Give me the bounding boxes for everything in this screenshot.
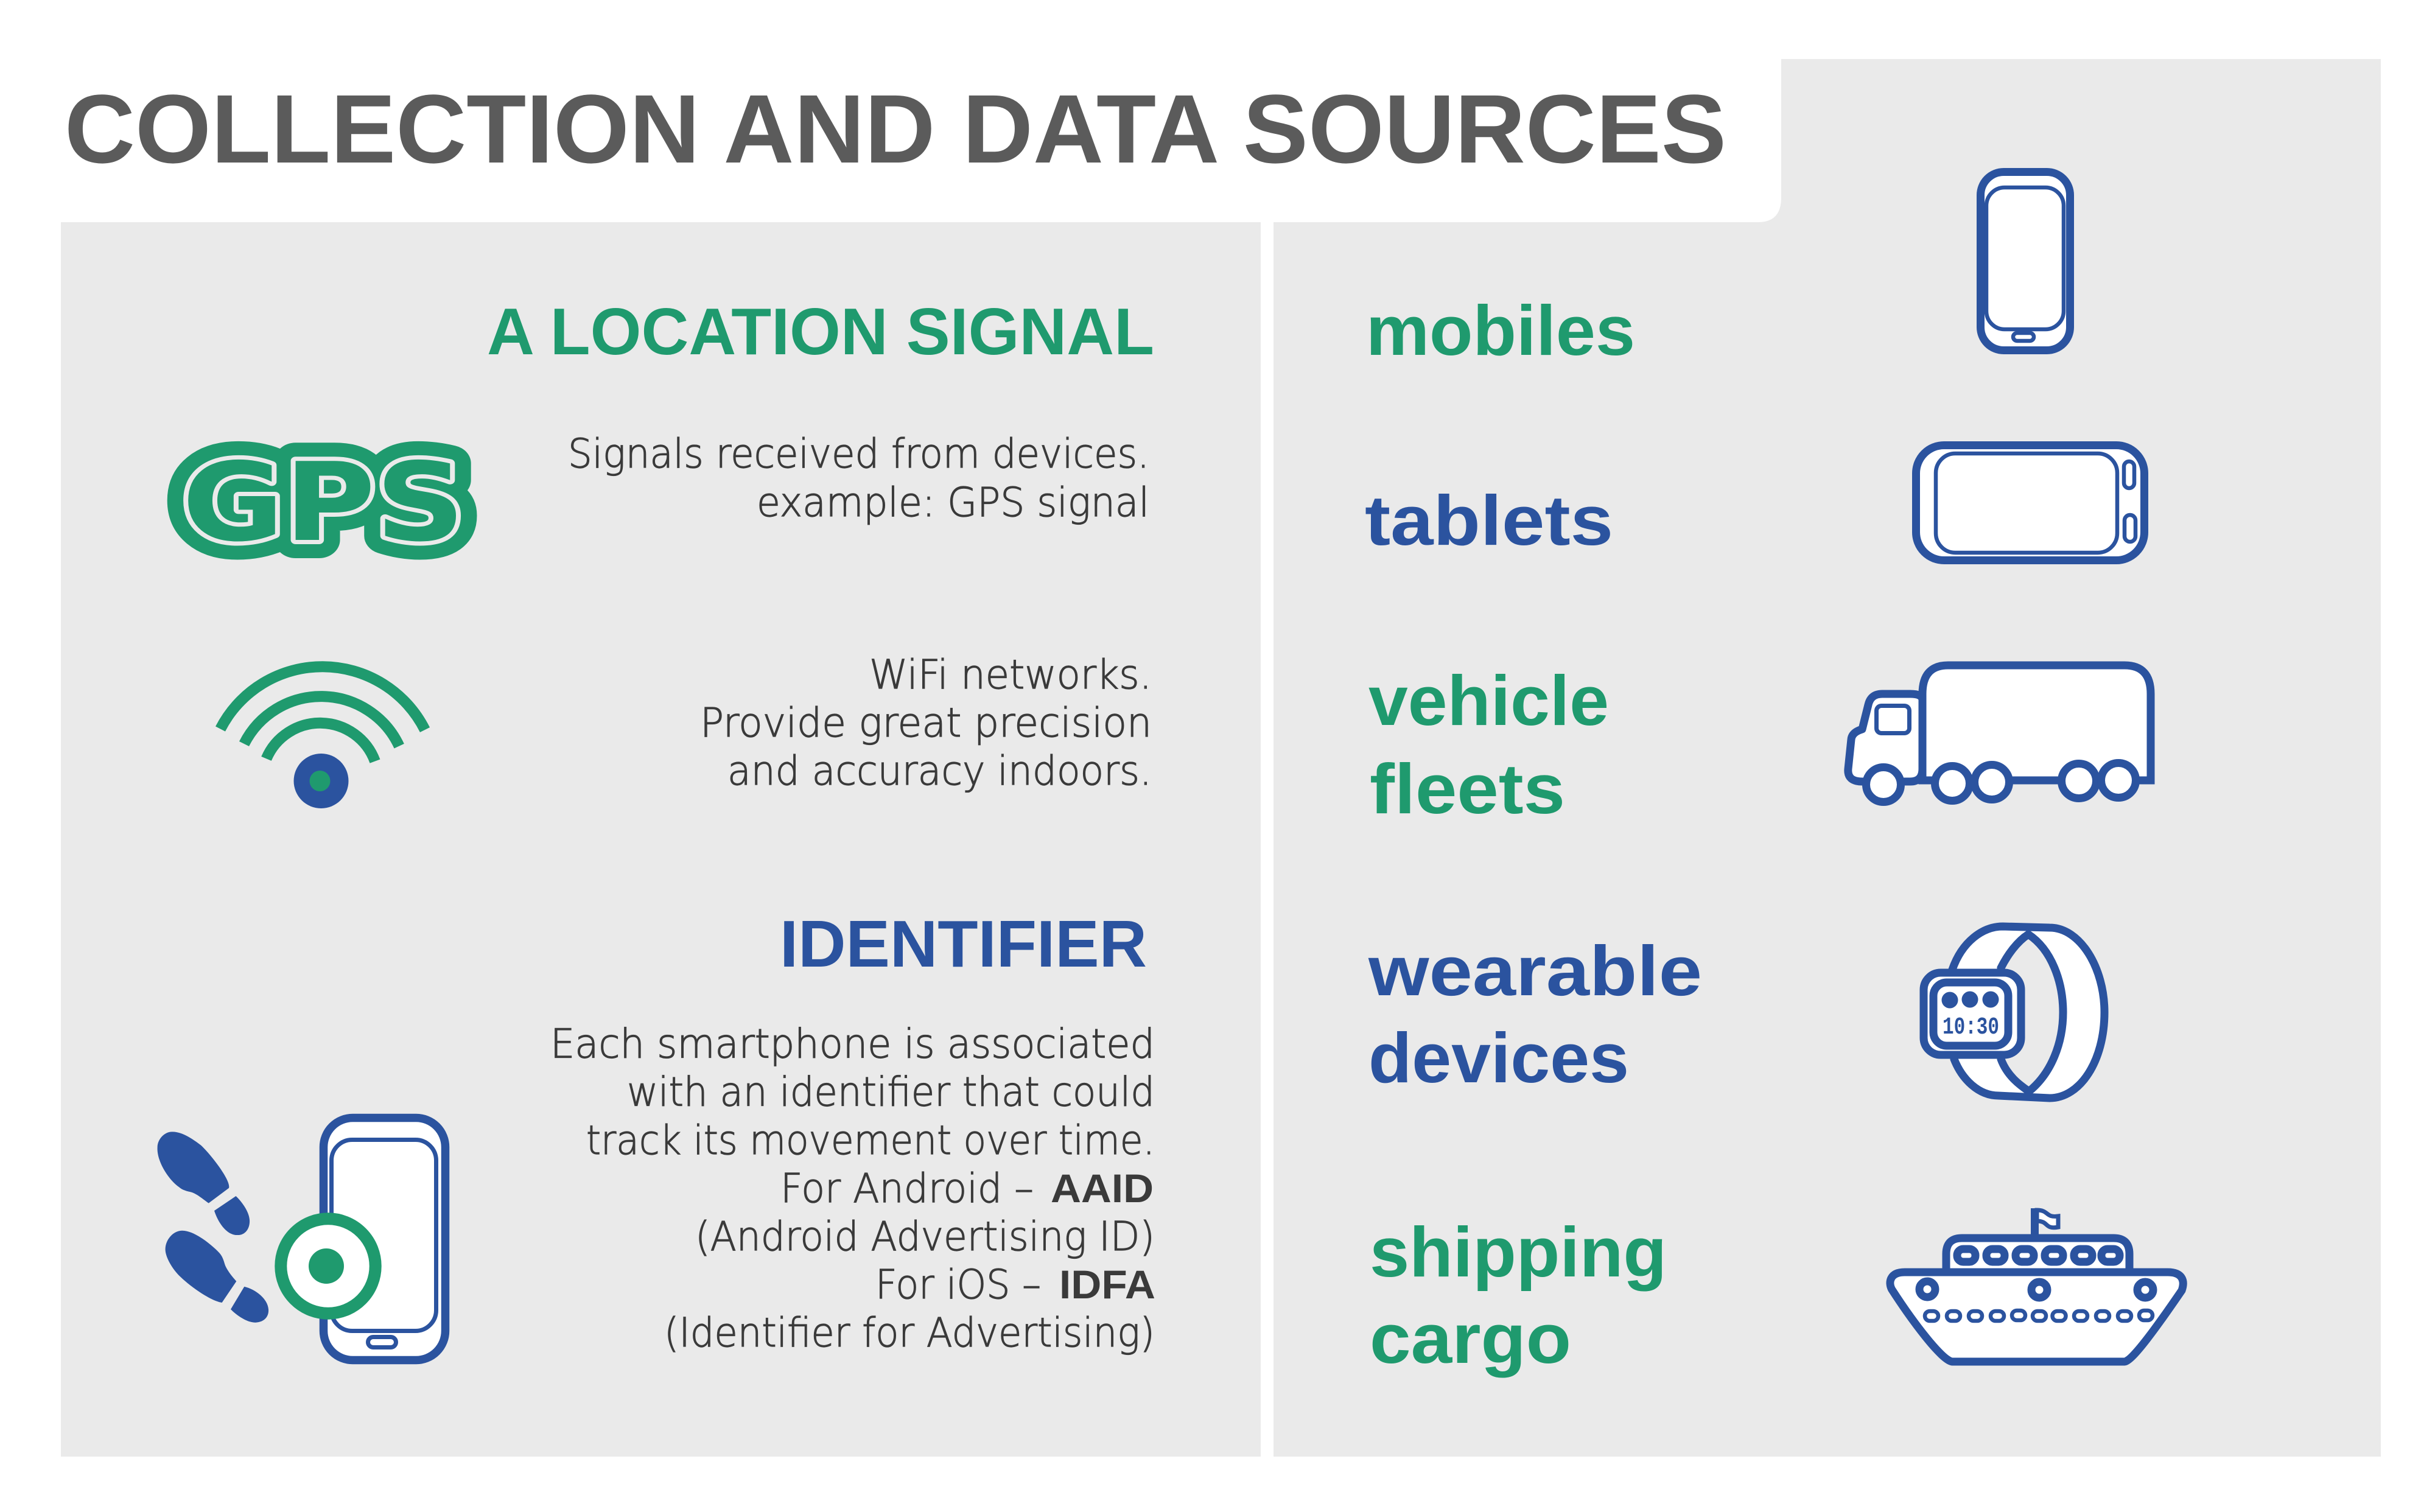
label: tablets: tablets (1365, 481, 1613, 560)
icon: GPS: GPS (182, 439, 465, 565)
label: vehicle fleets: vehicle (1368, 661, 1609, 740)
label: wearable devices: wearable (1368, 931, 1702, 1010)
icon: truck (1848, 665, 2151, 802)
icon: location target (281, 1219, 376, 1314)
label: vehicle fleets (1368, 661, 1609, 828)
text: identifier description: For iOS – (875, 1261, 1041, 1308)
heading: identifier: IDENTIFIER (780, 907, 1147, 981)
icon: smartwatch (1924, 926, 2104, 1098)
text: wifi description: WiFi networks. (869, 651, 1152, 698)
icon: ship (1890, 1208, 2183, 1362)
icon: smartwatch: 10:30 (1943, 1014, 1999, 1041)
text: identifier description: track its movement over time. (586, 1117, 1155, 1164)
label: shipping cargo (1370, 1213, 1667, 1378)
label: wearable devices: devices (1368, 1018, 1629, 1097)
label: shipping cargo: shipping (1370, 1213, 1667, 1292)
text: wifi description: Provide great precision (700, 699, 1152, 746)
icon: wifi (220, 667, 425, 808)
icon: tablet (1916, 446, 2144, 560)
text: GPS description: Signals received from devices. (568, 430, 1149, 477)
text: identifier description: IDFA (1059, 1262, 1155, 1307)
text: identifier description (550, 1020, 1155, 1356)
text: identifier description: AAID (1051, 1166, 1154, 1211)
label: shipping cargo: cargo (1370, 1299, 1571, 1378)
icon: mobile phone (1981, 172, 2070, 351)
text: wifi description (700, 651, 1152, 794)
heading: a location signal: A LOCATION SIGNAL (487, 295, 1154, 369)
icon: GPS: GPS (182, 439, 465, 565)
panel: location signal and identifier (61, 222, 1261, 1457)
text: identifier description: For Android – (780, 1165, 1034, 1212)
icon: phone (324, 1118, 446, 1360)
text: identifier description: with an identifier that could (627, 1069, 1155, 1115)
text: wifi description: and accuracy indoors. (727, 747, 1152, 794)
panel: device sources (1274, 59, 2381, 1457)
icon: GPS: GPS (182, 439, 465, 565)
icon: footprints and phone with target (158, 1118, 446, 1360)
title: COLLECTION AND DATA SOURCES (65, 74, 1726, 183)
icon: footprints (158, 1132, 268, 1323)
label: vehicle fleets: fleets (1370, 749, 1565, 828)
text: identifier description: (Android Advertising ID) (695, 1213, 1155, 1260)
text: identifier description: (Identifier for Advertising) (664, 1309, 1155, 1356)
text: identifier description: Each smartphone is associated (550, 1020, 1155, 1068)
text: GPS description (568, 430, 1149, 526)
text: GPS description: example: GPS signal (757, 479, 1149, 526)
label: wearable devices (1368, 931, 1702, 1097)
label: mobiles: mobiles (1366, 291, 1635, 370)
